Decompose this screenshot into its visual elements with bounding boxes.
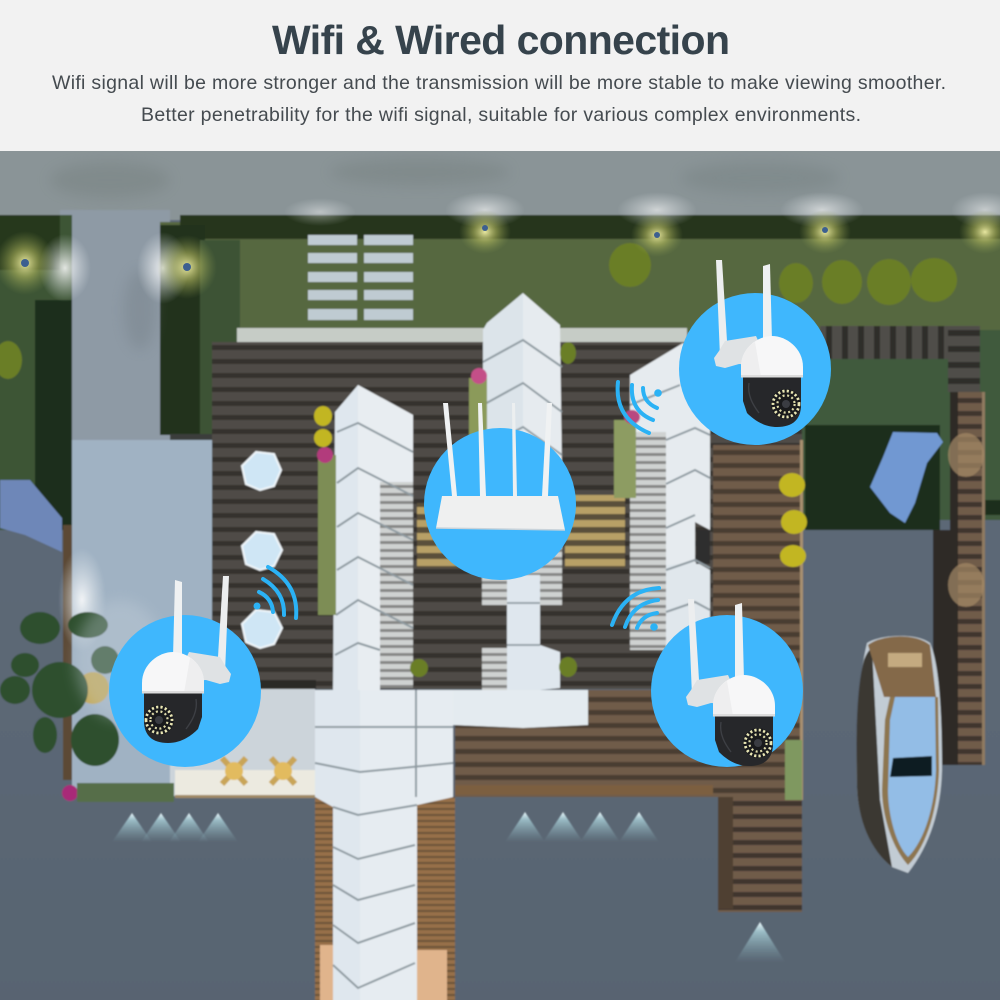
right jetty: [820, 326, 948, 359]
left wooden edge: [63, 525, 72, 780]
wifi signal: left: [256, 567, 296, 618]
lower left pavement: [170, 688, 315, 796]
white parapet: [237, 328, 687, 342]
router in blue circle: [424, 403, 576, 580]
stairs: [308, 235, 413, 320]
white walkway: [315, 797, 333, 1000]
right tower: [628, 342, 712, 566]
patio umbrellas: [242, 452, 282, 648]
water lights: [112, 812, 785, 962]
boat: [857, 636, 942, 873]
upper lawn: [160, 222, 1000, 332]
gold striped lights: [416, 502, 458, 568]
camera: left: [109, 576, 261, 767]
wifi signal: top right: [618, 382, 660, 433]
yellow garden light: [83, 672, 109, 704]
paving blotches: [50, 158, 840, 720]
title: Wifi & Wired connection: [272, 17, 730, 63]
camera: bottom right: [651, 599, 803, 767]
tree: [0, 612, 119, 766]
header band: [0, 0, 1000, 151]
rocks: [0, 480, 62, 552]
subtitle: [52, 72, 946, 126]
right lawn: [800, 330, 1000, 520]
paving band and path: [0, 151, 1000, 220]
camera: top right: [679, 260, 831, 445]
shrubs: [0, 243, 957, 677]
left lawn: [0, 215, 72, 530]
planter strips: [318, 455, 336, 615]
center tower: [480, 546, 564, 606]
subtitle: Wifi signal will be more stronger and the transmission will be more stable to make viewing smoother.: [52, 72, 946, 94]
patio tables: [222, 758, 295, 784]
subtitle: Better penetrability for the wifi signal, suitable for various complex environments.: [141, 104, 861, 126]
lower jetty: [718, 797, 802, 912]
left tower: [380, 478, 413, 688]
hedge lights: [0, 192, 1000, 304]
main wooden deck: [212, 342, 802, 689]
wifi signal: bottom right: [612, 588, 659, 629]
